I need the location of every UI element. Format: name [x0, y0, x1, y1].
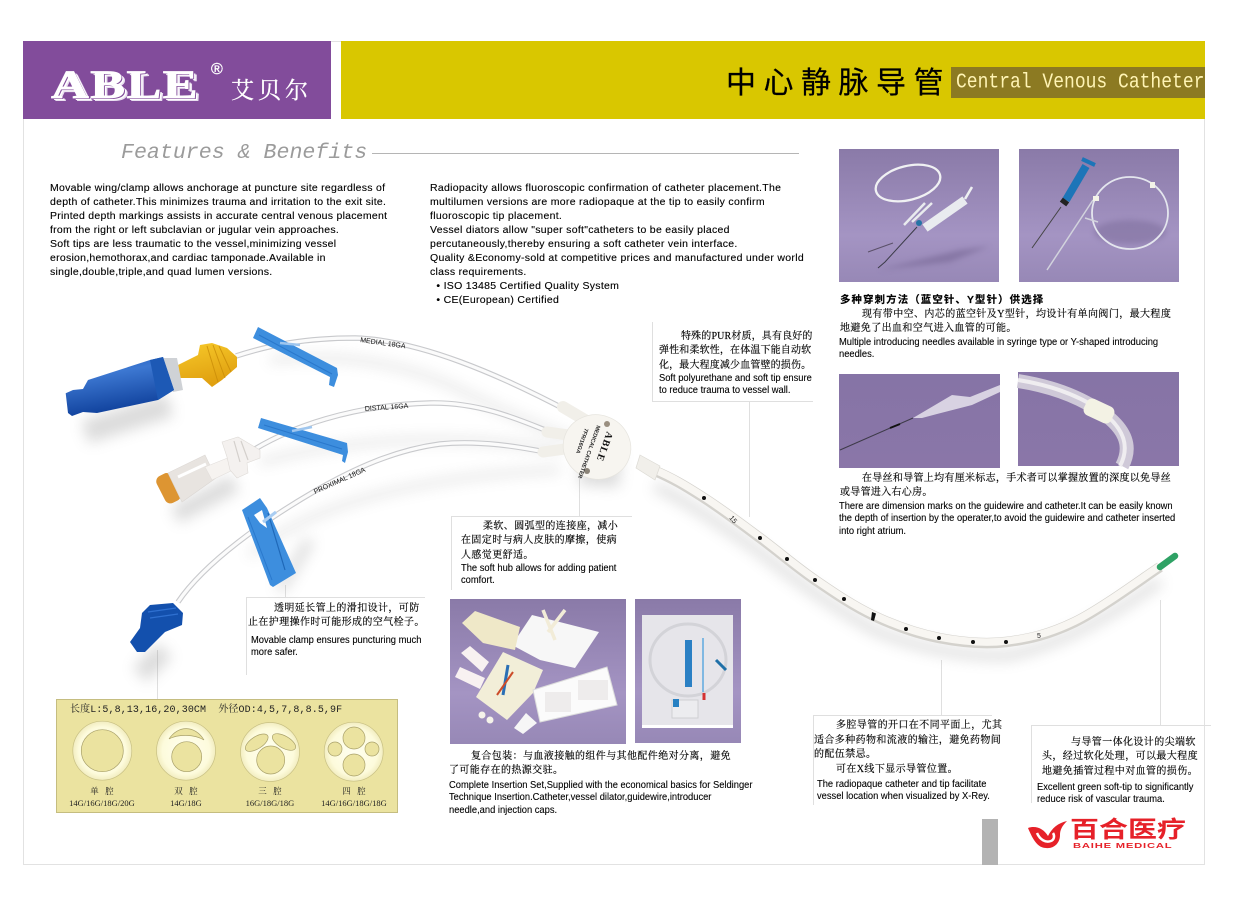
english text: needle,and injection caps. — [449, 805, 557, 816]
english text: more safer. — [251, 647, 298, 658]
callout: movable clamp — [248, 602, 425, 658]
depth label 5: 5 — [1037, 633, 1041, 640]
label: medial 18GA: MEDIAL 18GA — [360, 337, 406, 350]
text block: dimension marks — [839, 472, 1175, 537]
text block: left features: from the right or left subclavian or jugular vein approaches. — [50, 224, 339, 236]
english text: Movable clamp ensures puncturing much — [251, 635, 421, 646]
english text: Complete Insertion Set,Supplied with the economical basics for Seldinger — [449, 780, 752, 791]
chinese text: 可在X线下显示导管位置。 — [836, 764, 958, 775]
size specification: 长度L:5,8,13,16,20,30CM 外径OD:4,5,7,8,8.5,9F — [70, 705, 342, 716]
chinese text: 复合包装：与血液接触的组件与其他配件绝对分离，避免 — [471, 751, 731, 762]
english text — [839, 501, 1175, 537]
extension tube: distal — [255, 403, 550, 449]
hub label: ABLE — [593, 430, 615, 463]
english text — [449, 780, 752, 816]
english title band — [951, 67, 1205, 98]
callout: green soft tip — [1037, 736, 1198, 805]
connector: blue and yellow hub — [66, 343, 237, 416]
english text: vessel location when visualized by X-Rey. — [817, 791, 990, 802]
chinese text: 多腔导管的开口在不同平面上，尤其 — [836, 720, 1002, 731]
text block: introducing needles — [839, 294, 1171, 360]
chinese text — [449, 750, 731, 776]
text block: right features: Vessel diators allow "super soft"catheters to be easily placed — [430, 224, 730, 236]
chinese text — [1042, 736, 1198, 777]
photo: complete insertion set — [450, 599, 626, 744]
chinese text: 透明延长管上的滑扣设计，可防 — [274, 603, 420, 614]
chinese text: 与导管一体化设计的尖端软 — [1071, 737, 1196, 748]
depth marks — [702, 496, 1008, 644]
english text: There are dimension marks on the guidewire and catheter.It can be easily known — [839, 501, 1173, 512]
text block: right features: • CE(European) Certified — [436, 294, 559, 306]
panel: lumen options — [56, 700, 398, 812]
chinese heading: 多种穿刺方法（蓝空针、Y型针）供选择 — [840, 295, 1044, 306]
photo: guidewire marks — [839, 374, 1000, 468]
baihe logo text — [1070, 816, 1186, 850]
header: brand panel — [23, 41, 331, 119]
chinese text: 在导丝和导管上均有厘米标志，手术者可以掌握放置的深度以免导丝 — [862, 473, 1171, 484]
english text — [251, 635, 421, 658]
photo: packaged kit — [635, 599, 741, 743]
chinese text — [840, 472, 1171, 498]
chinese text: 特殊的PUR材质，具有良好的 — [681, 331, 813, 342]
hub label size: 7FR/16GA — [574, 427, 589, 454]
text block: left features: erosion,hemothorax,and cardiac tamponade.Available in — [50, 252, 326, 264]
english text — [659, 373, 812, 396]
chinese text: 适合多种药物和流液的输注，避免药物间 — [814, 735, 1001, 746]
label: triple lumen: 三 腔 — [258, 786, 282, 796]
text block: right features: class requirements. — [430, 266, 527, 278]
english text: into right atrium. — [839, 526, 906, 537]
chinese text: 了可能存在的热源交驻。 — [449, 765, 563, 776]
chinese brand name: 百合医疗 — [1070, 816, 1186, 842]
label: double lumen: 14G/18G — [170, 798, 202, 808]
english text — [817, 779, 990, 802]
label: triple lumen: 16G/18G/18G — [246, 798, 294, 808]
english text — [839, 337, 1158, 360]
label: triple lumen — [246, 786, 294, 808]
english text: The radiopaque catheter and tip facilitate — [817, 779, 986, 790]
text block: right features: • ISO 13485 Certified Quality System — [436, 280, 619, 292]
lumen: quad — [324, 722, 383, 781]
heading text: Features & Benefits — [121, 141, 367, 165]
lumen panel text — [69, 703, 387, 808]
label: double lumen: 双 腔 — [174, 786, 198, 796]
connector: blue proximal hub — [130, 603, 183, 652]
text block: right features — [430, 182, 804, 306]
text block: right features: Quality &Economy-sold at competitive prices and manufactured under world — [430, 252, 804, 264]
english title: Central Venous Catheter — [956, 71, 1204, 95]
text block: left features — [50, 182, 388, 278]
chinese text: 止在护理操作时可能形成的空气栓子。 — [248, 617, 425, 628]
english text — [461, 563, 616, 586]
connector: clear and orange cap — [154, 437, 260, 505]
main catheter tube — [655, 470, 1175, 644]
english text: reduce risk of vascular trauma. — [1037, 794, 1165, 805]
chinese title: 中心静脉导管 — [726, 67, 951, 100]
blue clamp: proximal — [242, 498, 296, 587]
text block: left features: Soft tips are less traumatic to the vessel,minimizing vessel — [50, 238, 336, 250]
photo: catheter marks — [1018, 372, 1179, 466]
english text: to reduce trauma to vessel wall. — [659, 385, 790, 396]
english text: the depth of insertion by the operater,to avoid the guidewire and catheter inserted — [839, 513, 1175, 524]
leader lines — [158, 322, 1211, 805]
lumen: double — [156, 721, 216, 780]
label: single lumen — [69, 786, 135, 808]
footer grey bar — [982, 819, 998, 865]
chinese text — [659, 330, 813, 371]
chinese text: 头，经过软化处理，可以最大程度 — [1042, 751, 1198, 762]
callout: multi lumen openings — [814, 719, 1002, 802]
text block: right features: multilumen versions are more radiopaque at the tip to easily confirm — [430, 196, 765, 208]
soft hub — [543, 405, 660, 489]
text block: left features: single,double,triple,and quad lumen versions. — [50, 266, 272, 278]
drop shadows of catheter — [85, 358, 1160, 675]
chinese text — [814, 719, 1002, 775]
chinese text: 人感觉更舒适。 — [461, 550, 534, 561]
baihe logo symbol — [1028, 821, 1067, 848]
label: double lumen — [170, 786, 202, 808]
extension tube: medial — [236, 337, 570, 412]
chinese text: 现有带中空、内芯的蓝空针及Y型针，均设计有单向阀门，最大程度 — [862, 309, 1171, 320]
chinese text: 地避免了出血和空气进入血管的可能。 — [840, 323, 1017, 334]
hub label small: MEDICAL CATHETER — [576, 424, 601, 479]
label: quad lumen: 14G/16G/18G/18G — [321, 798, 387, 808]
chinese text: 在固定时与病人皮肤的摩擦，使病 — [461, 535, 617, 546]
green soft tip — [1160, 556, 1175, 567]
chinese text — [461, 520, 618, 561]
photo: syringe needle set — [839, 149, 999, 282]
english text: comfort. — [461, 575, 495, 586]
english text — [1037, 782, 1194, 805]
label: single lumen: 单 腔 — [90, 786, 114, 796]
chinese text: 柔软、圆弧型的连接座，减小 — [483, 521, 618, 532]
brand name chinese: 艾贝尔 — [231, 78, 312, 103]
text block: right features: fluoroscopic tip placement. — [430, 210, 562, 222]
registered mark: ® — [211, 61, 223, 78]
lumen: triple — [240, 722, 300, 782]
label: quad lumen: 四 腔 — [342, 786, 366, 796]
english brand name: BAIHE MEDICAL — [1073, 843, 1172, 850]
extension tube: proximal — [178, 443, 545, 602]
chinese text: 或导管进入右心房。 — [840, 487, 933, 498]
depth label 15: 15 — [727, 515, 738, 525]
label: quad lumen — [321, 786, 387, 808]
english text: Technique Insertion.Catheter,vessel dilator,guidewire,introducer — [449, 792, 711, 803]
text block: left features: Movable wing/clamp allows anchorage at puncture site regardless of — [50, 182, 385, 194]
blue clamp: distal — [258, 418, 348, 463]
label: distal 16GA: DISTAL 16GA — [365, 403, 409, 413]
lumen: single — [73, 721, 132, 780]
chinese text: 化，最大程度减少血管壁的损伤。 — [659, 360, 811, 371]
english text: Excellent green soft-tip to significantly — [1037, 782, 1193, 793]
chinese text: 地避免插管过程中对血管的损伤。 — [1042, 766, 1198, 777]
header: title panel — [341, 41, 1205, 119]
chinese text — [840, 308, 1171, 334]
label: single lumen: 14G/16G/18G/20G — [69, 798, 135, 808]
text block: left features: Printed depth markings assists in accurate central venous placement — [50, 210, 387, 222]
chinese text — [248, 602, 425, 628]
chinese text: 的配伍禁忌。 — [814, 749, 876, 760]
english text: needles. — [839, 349, 874, 360]
blue clamp: medial — [253, 327, 338, 387]
text block: insertion set — [449, 750, 752, 816]
text block: right features: percutaneously,thereby ensuring a soft catheter vein interface. — [430, 238, 738, 250]
text block: left features: depth of catheter.This minimizes trauma and irritation to the exit site. — [50, 196, 386, 208]
label: proximal 18GA: PROXIMAL 18GA — [313, 467, 367, 496]
english text: The soft hub allows for adding patient — [461, 563, 616, 574]
photo: blue syringe and y needle — [1019, 149, 1179, 282]
english text: Multiple introducing needles available in syringe type or Y-shaped introducing — [839, 337, 1158, 348]
chinese text: 弹性和柔软性，在体温下能自动软 — [659, 345, 811, 356]
callout: soft hub — [461, 520, 618, 586]
callout: polyurethane — [659, 330, 813, 396]
ABLE logo wordmark: ABLE — [51, 62, 199, 107]
english text: Soft polyurethane and soft tip ensure — [659, 373, 812, 384]
text block: right features: Radiopacity allows fluoroscopic confirmation of catheter placement.The — [430, 182, 781, 194]
